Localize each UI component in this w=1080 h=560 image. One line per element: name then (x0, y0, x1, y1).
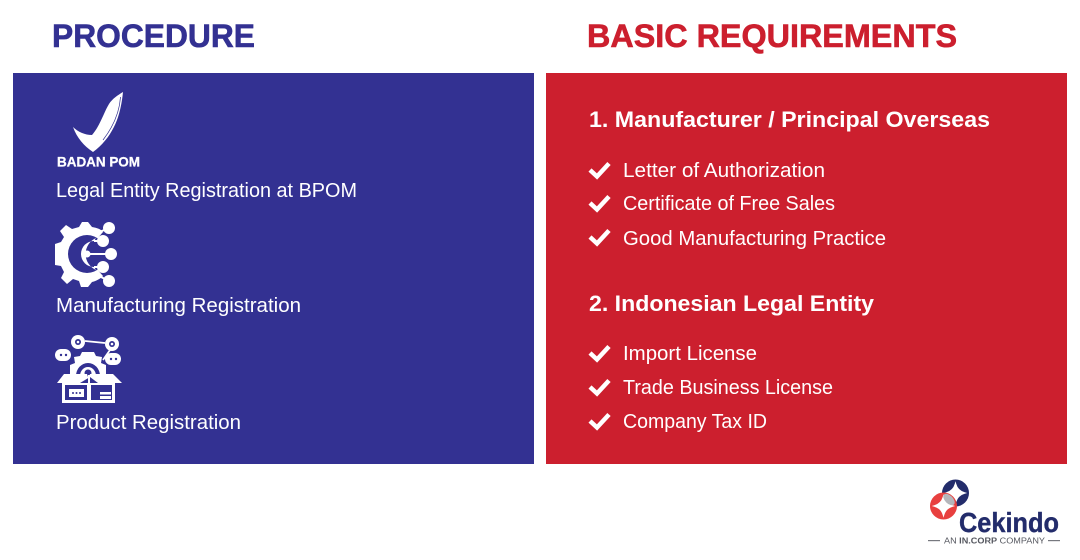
text: Cekindo wordmark: Cekindo (959, 507, 1059, 538)
list item: trade business license: Trade Business License (623, 377, 833, 399)
list item: letter of authorization: Letter of Authorization (623, 160, 825, 182)
panel: basic requirements (546, 73, 1067, 464)
heading: basic requirements: BASIC REQUIREMENTS (587, 18, 957, 54)
list item: good manufacturing practice: Good Manufacturing Practice (623, 228, 886, 250)
icon: logo mark (930, 480, 969, 520)
subheading: manufacturer: 1. Manufacturer / Principal Overseas (589, 107, 990, 132)
panel: procedure (13, 73, 534, 464)
logo: Cekindo (928, 480, 1060, 546)
text: an in.corp company: AN IN.CORP COMPANY (944, 536, 1046, 546)
text: legal entity registration: Legal Entity Registration at BPOM (56, 180, 357, 202)
heading: procedure: PROCEDURE (52, 18, 255, 54)
subheading: indonesian legal entity: 2. Indonesian Legal Entity (589, 291, 875, 316)
list item: certificate of free sales: Certificate of Free Sales (623, 193, 835, 215)
icon: Badan POM logo (57, 92, 140, 170)
icon: gear with nodes (55, 222, 117, 287)
text: manufacturing registration: Manufacturing Registration (56, 295, 301, 317)
icon: Badan POM logo: BADAN POM (57, 154, 140, 170)
list item: company tax id: Company Tax ID (623, 411, 767, 433)
text: product registration: Product Registration (56, 412, 241, 434)
list item: import license: Import License (623, 343, 757, 365)
icon: product box with gear (55, 335, 122, 403)
